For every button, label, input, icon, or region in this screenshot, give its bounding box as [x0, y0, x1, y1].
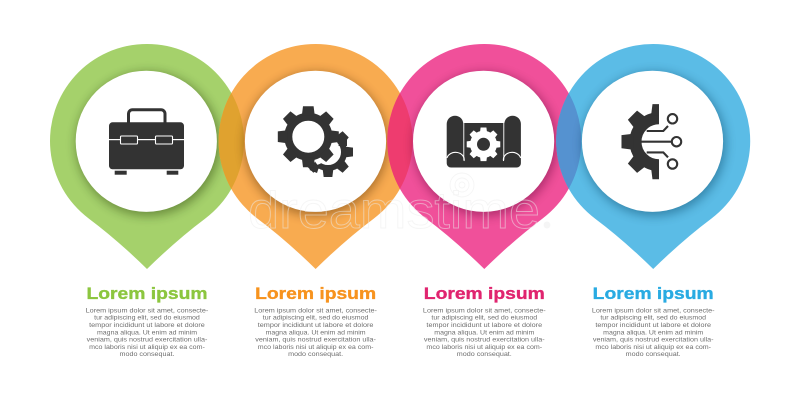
overlap orange and pink: [387, 93, 412, 189]
blue white disc: [582, 71, 723, 212]
blue pin shape: [556, 44, 750, 269]
text block: orange: [254, 285, 377, 358]
heading: pink: Lorem ipsum: [424, 285, 545, 303]
body text: pink: Lorem ipsum dolor sit amet, consecte-: [423, 307, 546, 314]
body text: green: veniam, quis nostrud exercitation ulla-: [87, 337, 207, 344]
shadow under blue disc: [582, 72, 726, 216]
icon: blueprint with gear: [447, 116, 521, 168]
body text: orange: Lorem ipsum dolor sit amet, consecte-: [254, 307, 377, 314]
body text: blue: veniam, quis nostrud exercitation ulla-: [593, 337, 714, 344]
body text: pink: modo consequat.: [457, 351, 512, 358]
pink white disc: [413, 71, 554, 212]
heading: orange: Lorem ipsum: [255, 285, 376, 303]
heading: green: Lorem ipsum: [86, 285, 208, 303]
shadow under green disc: [76, 72, 220, 216]
body text: orange: veniam, quis nostrud exercitation ulla-: [255, 337, 376, 344]
icon: toolbox: [109, 110, 184, 175]
overlap green and orange: [218, 93, 244, 189]
body text: orange: tempor incididunt ut labore et dolore: [258, 322, 374, 329]
body text: blue: [592, 307, 715, 358]
pink pin shape: [387, 44, 581, 269]
icon: half gear with circuit: [622, 104, 682, 180]
text block: blue: [592, 285, 715, 358]
body text: green: modo consequat.: [120, 351, 175, 358]
body text: pink: tur adipiscing elit, sed do eiusmod: [431, 315, 537, 322]
text block: pink: [423, 285, 546, 358]
body text: pink: tempor incididunt ut labore et dolore: [426, 322, 542, 329]
body text: blue: mco laboris nisi ut aliquip ex ea com-: [595, 344, 711, 351]
body text: blue: Lorem ipsum dolor sit amet, consecte-: [592, 307, 715, 314]
shadow under orange disc: [244, 72, 388, 216]
body text: green: Lorem ipsum dolor sit amet, consecte-: [86, 307, 208, 314]
body text: orange: magna aliqua. Ut enim ad minim: [266, 329, 366, 336]
overlap pink and blue: [556, 93, 582, 189]
body text: orange: tur adipiscing elit, sed do eiusmod: [263, 315, 369, 322]
body text: pink: mco laboris nisi ut aliquip ex ea com-: [426, 344, 542, 351]
body text: pink: veniam, quis nostrud exercitation ulla-: [424, 337, 545, 344]
watermark: dreamstime: [248, 182, 540, 240]
body text: green: tempor incididunt ut labore et dolore: [89, 322, 205, 329]
body text: green: mco laboris nisi ut aliquip ex ea com-: [89, 344, 205, 351]
panel: orange pin with gears: [218, 44, 400, 269]
text block: green: [86, 285, 208, 358]
panel: green pin with toolbox: [50, 44, 244, 269]
body text: pink: [423, 307, 546, 358]
body text: blue: magna aliqua. Ut enim ad minim: [603, 329, 704, 336]
body text: pink: magna aliqua. Ut enim ad minim: [434, 329, 535, 336]
panel: blue pin with gear circuit: [556, 44, 750, 269]
body text: blue: tempor incididunt ut labore et dolore: [595, 322, 711, 329]
body text: blue: modo consequat.: [626, 351, 681, 358]
icon: gears: [278, 106, 353, 177]
body text: green: tur adipiscing elit, sed do eiusmod: [94, 315, 200, 322]
green pin shape: [50, 44, 244, 269]
heading: blue: Lorem ipsum: [593, 285, 714, 303]
panel: pink pin with blueprint: [387, 44, 569, 269]
body text: blue: tur adipiscing elit, sed do eiusmod: [600, 315, 706, 322]
green white disc: [76, 71, 217, 212]
body text: green: magna aliqua. Ut enim ad minim: [97, 329, 197, 336]
body text: orange: mco laboris nisi ut aliquip ex ea com-: [258, 344, 373, 351]
orange white disc: [245, 71, 386, 212]
body text: orange: [254, 307, 377, 358]
body text: green: [86, 307, 208, 358]
body text: orange: modo consequat.: [288, 351, 343, 358]
orange pin shape: [219, 44, 413, 269]
shadow under pink disc: [413, 72, 557, 216]
